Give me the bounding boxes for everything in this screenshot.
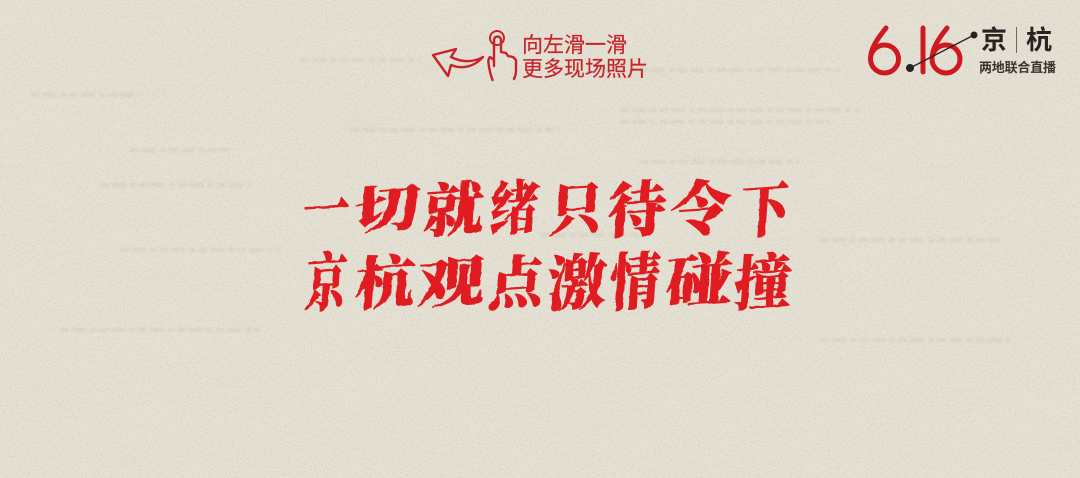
headline line 1: 一: [301, 176, 351, 246]
headline line 1: 令: [668, 175, 734, 245]
headline line 1: 只: [548, 177, 604, 243]
headline line 1: 绪: [488, 176, 540, 244]
logo city names: 京: [981, 25, 1007, 55]
headline line 2: 情: [607, 247, 663, 319]
headline line 2: 点: [486, 251, 546, 317]
hint text: 更多现场照片: [522, 58, 648, 81]
hint text: 向左滑一滑: [522, 34, 627, 57]
headline line 2: 观: [415, 252, 487, 316]
headline line 2: 碰: [664, 248, 734, 316]
headline line 1: 下: [738, 178, 790, 246]
logo city names: [981, 25, 1052, 55]
headline line 1: 待: [606, 176, 668, 246]
logo city names: 杭: [1026, 25, 1052, 55]
logo subtitle: 两地联合直播: [979, 60, 1056, 75]
headline line 1: 就: [422, 177, 486, 245]
headline line 2: 撞: [732, 249, 794, 319]
swipe hint: [432, 30, 648, 82]
headline line 2: 杭: [353, 250, 417, 318]
logo: 6.16 Beijing Hangzhou: [868, 25, 1056, 76]
headline line 2: 京: [303, 248, 349, 320]
hint text: [522, 34, 648, 81]
icon: left arrow and pointing hand: [432, 30, 518, 82]
headline line 1: 切: [352, 180, 422, 240]
logo numerals and connecting line: [868, 26, 978, 76]
headline line 2: 激: [545, 249, 609, 319]
